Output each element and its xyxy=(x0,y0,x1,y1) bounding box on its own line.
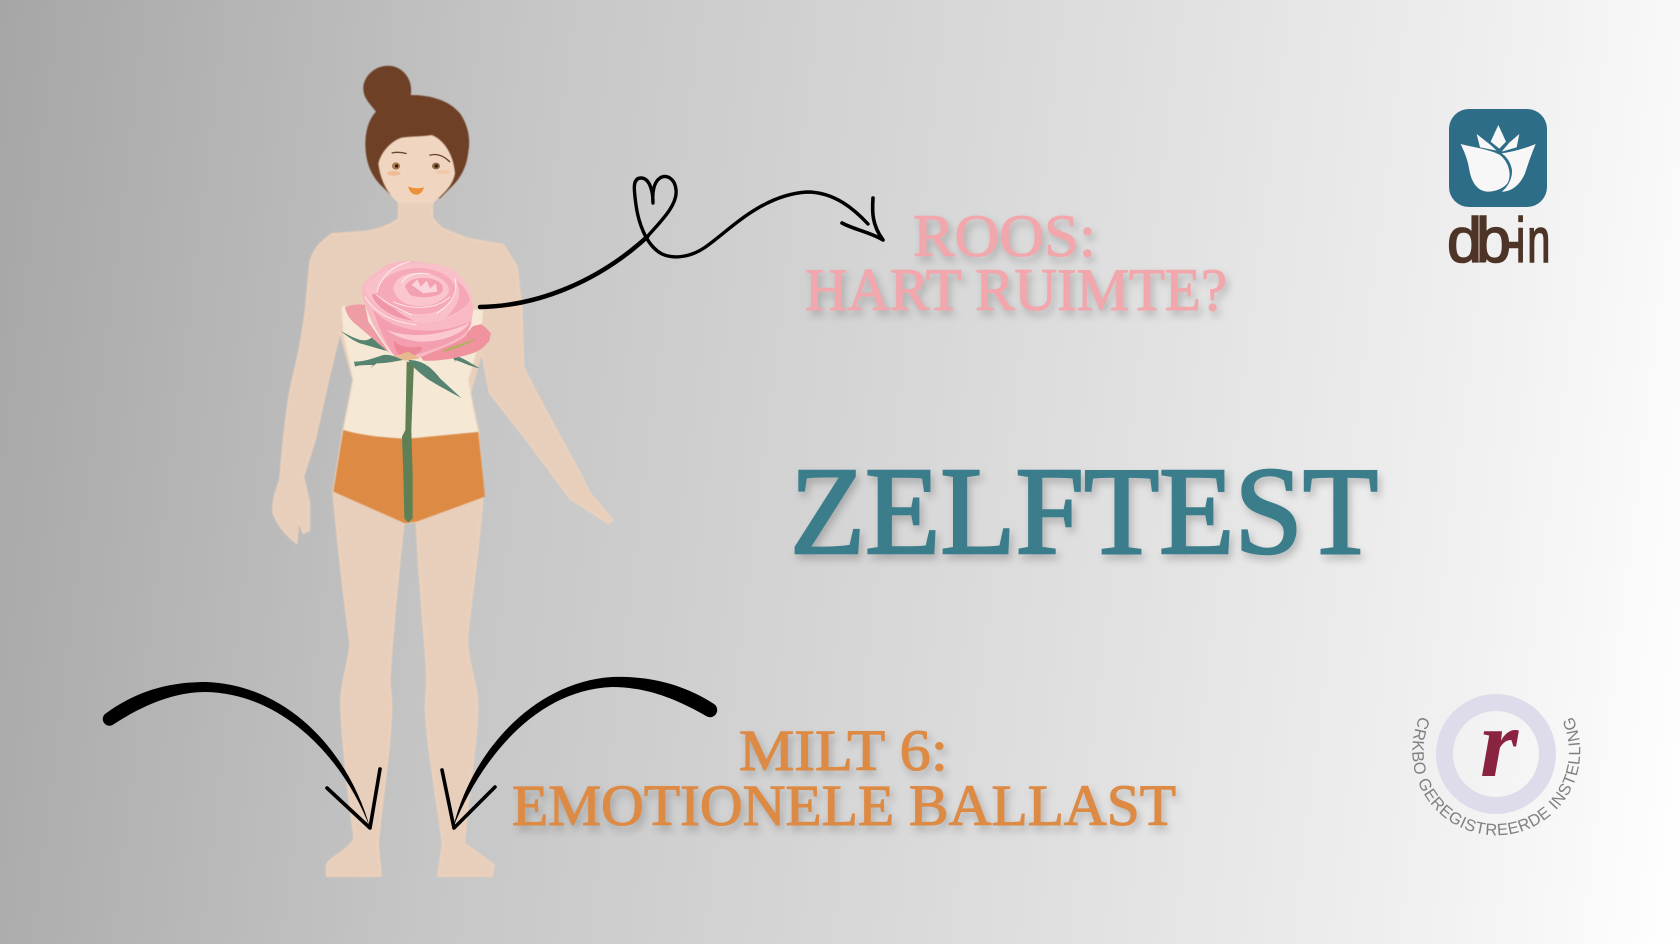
heading: Milt 6 emotionele ballast xyxy=(512,718,1176,838)
arrow: left curve to foot xyxy=(103,682,380,828)
shorts xyxy=(333,430,485,523)
heading: Milt 6 emotionele ballast: MILT 6: xyxy=(739,718,948,783)
hair xyxy=(363,66,469,198)
heading: Roos hart ruimte: ROOS: xyxy=(913,203,1096,269)
body silhouette xyxy=(273,197,613,876)
eyes, brows and mouth xyxy=(387,152,450,195)
badge: CRKBO: r xyxy=(1480,690,1519,798)
rose leaves xyxy=(341,331,480,398)
arrow: heart loop pointing to Roos xyxy=(480,176,883,307)
face xyxy=(378,135,455,203)
logo wordmark: db- xyxy=(1447,206,1525,276)
rose stem xyxy=(402,362,414,523)
heading: Roos hart ruimte xyxy=(805,203,1227,323)
logo wordmark: in xyxy=(1516,207,1550,276)
badge: CRKBO: CRKBO GEREGISTREERDE INSTELLING xyxy=(1412,718,1580,836)
heading: Roos hart ruimte: HART RUIMTE? xyxy=(805,257,1227,323)
heading: Milt 6 emotionele ballast: EMOTIONELE BALLAST xyxy=(512,773,1176,838)
rose bloom xyxy=(345,261,491,361)
title: Zelftest: ZELFTEST xyxy=(790,443,1378,581)
logo icon: lotus xyxy=(1449,109,1547,207)
arrow: right curve to foot xyxy=(442,677,717,828)
logo: db-in xyxy=(1447,109,1550,276)
figure: woman with rose xyxy=(273,66,613,876)
top xyxy=(342,307,483,439)
